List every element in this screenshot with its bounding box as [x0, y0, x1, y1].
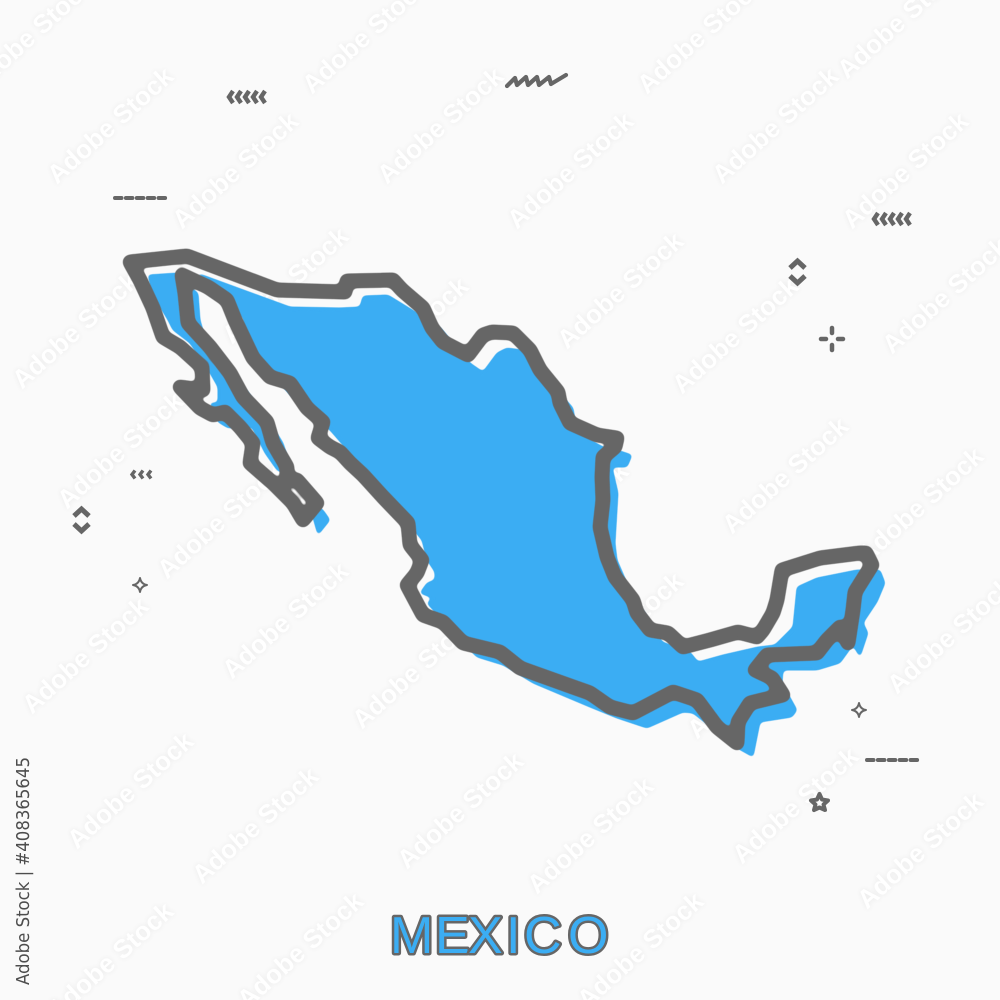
watermark pattern: Adobe Stock: [501, 106, 639, 234]
title: MEXICO: MEXICO: [390, 907, 608, 965]
watermark pattern: Adobe Stock: [551, 226, 689, 354]
watermark pattern: Adobe Stock: [216, 556, 354, 684]
watermark pattern: Adobe Stock: [716, 411, 854, 539]
decoration: dashes top left: [115, 196, 167, 200]
watermark pattern: Adobe Stock: [851, 441, 989, 569]
watermark pattern: Adobe Stock: [371, 61, 509, 189]
decoration: left chevrons small: [132, 470, 151, 478]
watermark pattern: Adobe Stock: [166, 106, 304, 234]
watermark pattern: Adobe Stock: [41, 61, 179, 189]
decoration: squiggle: [507, 75, 566, 86]
watermark pattern: Adobe Stock: [186, 761, 324, 889]
decoration: crosshair plus: [821, 328, 843, 350]
watermark pattern: Adobe Stock: [51, 386, 189, 514]
decoration: dashes bottom right: [867, 758, 919, 762]
watermark pattern: Adobe Stock: [836, 106, 974, 234]
watermark pattern: Adobe Stock: [381, 396, 519, 524]
watermark pattern: Adobe Stock: [496, 456, 634, 584]
side credit text: Adobe Stock | #408365645: [13, 757, 34, 985]
grey outline: Mexico border: [130, 256, 872, 743]
decoration: left chevrons top: [229, 91, 265, 103]
watermark pattern: Adobe Stock: [151, 456, 289, 584]
watermark pattern: Adobe Stock: [726, 741, 864, 869]
decoration: up down chevrons left: [74, 509, 89, 531]
watermark pattern: Adobe Stock: [521, 771, 659, 899]
map: Mexico: [130, 256, 885, 757]
decoration: star: [811, 794, 828, 810]
watermark pattern: Adobe Stock: [706, 61, 844, 189]
watermark pattern: Adobe Stock: [336, 271, 474, 399]
decoration: up down chevrons right: [790, 261, 805, 283]
decoration: sparkle right: [852, 703, 866, 717]
blue fill: mainland: [197, 273, 885, 757]
blue fill: Baja California: [148, 273, 330, 535]
watermark pattern: Adobe Stock: [61, 726, 199, 854]
watermark pattern: Adobe Stock: [681, 616, 819, 744]
decoration: sparkle left: [133, 578, 147, 592]
watermark pattern: Adobe Stock: [216, 221, 354, 349]
watermark pattern: Adobe Stock: [16, 591, 154, 719]
watermark pattern: Adobe Stock: [391, 746, 529, 874]
watermark pattern: Adobe Stock: [851, 786, 989, 914]
watermark pattern: Adobe Stock: [346, 606, 484, 734]
watermark pattern: Adobe Stock: [551, 566, 689, 694]
decoration: left chevrons right: [874, 213, 910, 225]
watermark pattern: Adobe Stock: [6, 266, 144, 394]
watermark pattern: Adobe Stock: [666, 271, 804, 399]
